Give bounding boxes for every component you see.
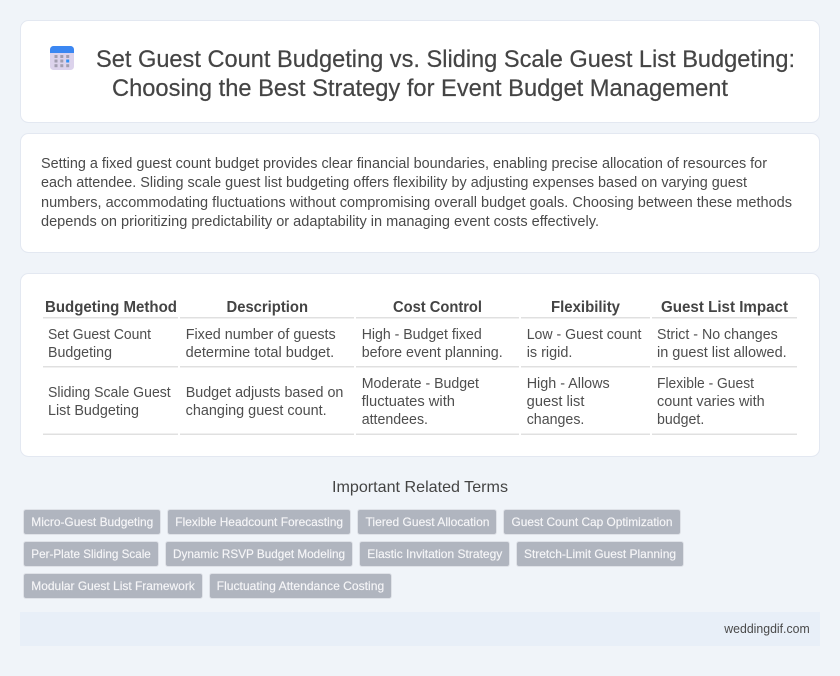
tag: flexible headcount forecasting: Flexible Headcount Forecasting: [175, 515, 343, 529]
table row: sliding scale guest list budgeting: changes.: [527, 412, 584, 428]
text block: introduction paragraph: numbers, accommodating fluctuations without compromising overall budget goals. Choosing between these methods: [41, 195, 792, 211]
table row: set guest count budgeting: determine total budget.: [186, 345, 334, 361]
tag: flexible headcount forecasting: [168, 510, 350, 534]
table row: set guest count budgeting: Budgeting: [48, 345, 112, 361]
footer: [20, 612, 820, 646]
panel: comparison table: [20, 274, 820, 456]
table row: sliding scale guest list budgeting: Sliding Scale Guest: [48, 385, 171, 401]
table header row: Description: [226, 299, 308, 316]
table row: set guest count budgeting: Strict - No changes: [657, 327, 778, 343]
table row: set guest count budgeting: Set Guest Count: [48, 327, 151, 343]
text block: introduction paragraph: [41, 156, 792, 230]
tag: dynamic rsvp budget modeling: [166, 542, 352, 566]
title: Set Guest Count Budgeting vs. Sliding Scale Guest List Budgeting:: [96, 46, 795, 73]
tag: stretch-limit guest planning: [516, 542, 684, 566]
table row: sliding scale guest list budgeting: changing guest count.: [186, 403, 327, 419]
tag: elastic invitation strategy: [360, 542, 510, 566]
table header row: Flexibility: [551, 299, 620, 316]
table row: set guest count budgeting: [43, 327, 797, 368]
title: Choosing the Best Strategy for Event Budget Management: [112, 75, 728, 102]
table row: set guest count budgeting: Low - Guest count: [527, 327, 641, 343]
table row: sliding scale guest list budgeting: budget.: [657, 412, 704, 428]
table header row: Budgeting Method: [45, 299, 177, 316]
text block: introduction paragraph: Setting a fixed guest count budget provides clear financial boundaries, enabling precise allocation of resources for: [41, 156, 767, 172]
tag: micro-guest budgeting: [24, 510, 160, 534]
title: [96, 46, 795, 102]
tag: elastic invitation strategy: Elastic Invitation Strategy: [367, 547, 502, 561]
table row: sliding scale guest list budgeting: guest list: [527, 394, 584, 410]
tag: per-plate sliding scale: [24, 542, 158, 566]
table row: sliding scale guest list budgeting: Budget adjusts based on: [186, 385, 343, 401]
text block: introduction paragraph: each attendee. Sliding scale guest list budgeting offers flexibility by adjusting expenses based on varying guest: [41, 175, 747, 191]
table row: sliding scale guest list budgeting: count varies with: [657, 394, 765, 410]
table row: sliding scale guest list budgeting: [43, 376, 797, 435]
table row: sliding scale guest list budgeting: attendees.: [362, 412, 428, 428]
table header row: [43, 299, 797, 318]
table header row: Cost Control: [393, 299, 482, 316]
text block: introduction paragraph: depends on prioritizing predictability or adaptability in managing event costs effectively.: [41, 214, 599, 230]
icon: calendar: [50, 46, 74, 70]
footer source text: weddingdif.com: [723, 621, 810, 636]
table row: sliding scale guest list budgeting: High - Allows: [527, 376, 610, 392]
tag: modular guest list framework: [24, 574, 202, 598]
table row: sliding scale guest list budgeting: Moderate - Budget: [362, 376, 479, 392]
tag: tiered guest allocation: [358, 510, 496, 534]
tag: fluctuating attendance costing: [210, 574, 392, 598]
table row: set guest count budgeting: before event planning.: [362, 345, 503, 361]
table row: sliding scale guest list budgeting: Flexible - Guest: [657, 376, 754, 392]
tag: modular guest list framework: Modular Guest List Framework: [31, 579, 196, 593]
tag: dynamic rsvp budget modeling: Dynamic RSVP Budget Modeling: [173, 547, 345, 561]
tag: fluctuating attendance costing: Fluctuating Attendance Costing: [217, 579, 384, 593]
table row: set guest count budgeting: in guest list allowed.: [657, 345, 787, 361]
table row: sliding scale guest list budgeting: List Budgeting: [48, 403, 139, 419]
table row: set guest count budgeting: Fixed number of guests: [186, 327, 336, 343]
table header row: Guest List Impact: [661, 299, 789, 316]
tag: guest count cap optimization: [504, 510, 680, 534]
related term tags: [24, 510, 684, 598]
table row: sliding scale guest list budgeting: fluctuates with: [362, 394, 455, 410]
table row: set guest count budgeting: High - Budget fixed: [362, 327, 482, 343]
tag: per-plate sliding scale: Per-Plate Sliding Scale: [31, 547, 151, 561]
tag: micro-guest budgeting: Micro-Guest Budgeting: [31, 515, 153, 529]
tag: tiered guest allocation: Tiered Guest Allocation: [366, 515, 490, 529]
tag: stretch-limit guest planning: Stretch-Limit Guest Planning: [524, 547, 676, 561]
tag: guest count cap optimization: Guest Count Cap Optimization: [512, 515, 672, 529]
table row: set guest count budgeting: is rigid.: [527, 345, 572, 361]
panel: title header: [20, 20, 820, 122]
heading: important related terms: Important Related Terms: [332, 479, 508, 496]
panel: introduction: [20, 134, 820, 252]
